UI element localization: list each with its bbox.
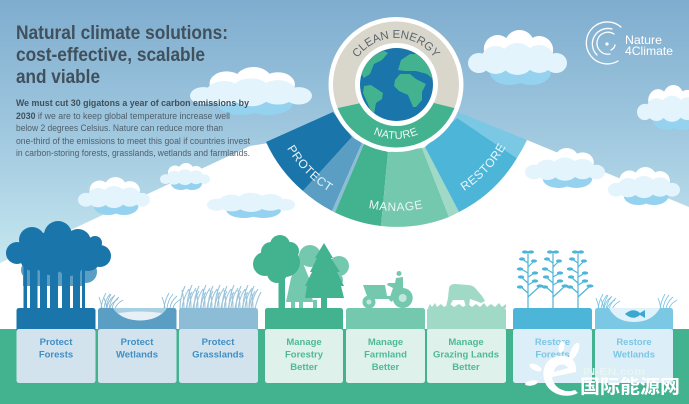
fan diagram	[266, 112, 527, 227]
card	[16, 329, 96, 383]
block	[265, 308, 343, 333]
segment: protect dark blue	[266, 112, 352, 191]
block	[427, 308, 506, 333]
label: Farmland	[364, 350, 407, 360]
column: protect grasslands	[179, 285, 261, 383]
label: Restore	[535, 337, 570, 348]
white mountain	[0, 132, 689, 404]
card	[595, 329, 673, 383]
column: manage grazing lands	[427, 284, 506, 383]
icon: watermark logo	[525, 341, 581, 396]
label: Protect	[202, 337, 235, 348]
label: protect: PROTECT	[287, 144, 334, 190]
green ground band	[0, 329, 689, 404]
icon: managed trees	[253, 235, 349, 308]
clouds	[78, 30, 689, 218]
intro text: We must cut 30 gigatons a year of carbon emissions by	[16, 98, 249, 108]
icon: globe	[360, 48, 434, 121]
title: and viable	[16, 66, 100, 88]
title	[16, 22, 228, 88]
label: Manage	[286, 337, 322, 348]
logo: Nature4Climate: 4Climate	[625, 44, 673, 58]
label: Grasslands	[192, 350, 244, 360]
column: manage farmland	[346, 271, 425, 383]
label: Forests	[39, 350, 73, 360]
icon: tractor	[362, 271, 413, 308]
column: manage forestry	[253, 235, 349, 383]
icon: saplings	[517, 250, 594, 309]
card	[427, 329, 506, 383]
segment: restore light blue	[457, 112, 527, 158]
central circle	[328, 17, 464, 152]
label: Manage	[448, 337, 484, 348]
label: Manage	[368, 337, 403, 348]
logo: Nature4Climate	[586, 22, 673, 64]
block	[346, 308, 425, 333]
card	[513, 329, 592, 383]
segment: protect light blue	[332, 143, 364, 212]
sky background	[0, 0, 689, 270]
column: restore forests	[513, 250, 594, 383]
label: restore: RESTORE	[460, 143, 506, 191]
intro text: below 2 degrees Celsius. Nature can reduce more than	[16, 123, 223, 133]
label: Wetlands	[613, 350, 655, 360]
segment: manage light green	[381, 148, 449, 227]
text: site name: IN-EN.com	[583, 367, 645, 378]
label: Better	[290, 362, 318, 373]
card	[265, 329, 343, 383]
nature band	[338, 102, 454, 148]
label: Better	[372, 362, 400, 373]
title: Natural climate solutions:	[16, 22, 228, 44]
icon: tall grass	[180, 285, 261, 309]
column: restore wetlands	[595, 294, 677, 383]
icon: reeds	[596, 294, 677, 310]
title: cost-effective, scalable	[16, 44, 205, 66]
watermark	[525, 341, 680, 398]
column: protect forests	[6, 221, 111, 383]
intro text	[16, 98, 250, 158]
label: Forests	[535, 350, 570, 360]
text: chinese site name: 国际能源网	[580, 376, 680, 398]
block	[16, 308, 96, 333]
label: nature: NATURE	[374, 127, 418, 139]
label: Forestry	[285, 350, 324, 360]
logo: Nature4Climate: Nature	[625, 33, 662, 47]
icon: cow	[428, 284, 506, 308]
card	[346, 329, 425, 383]
label: Restore	[616, 337, 652, 348]
label: Grazing Lands	[433, 350, 499, 360]
label: manage: MANAGE	[369, 200, 422, 211]
block with water	[98, 308, 176, 333]
label: clean energy: CLEAN ENERGY	[353, 30, 440, 56]
card	[98, 329, 176, 383]
card	[179, 329, 258, 383]
segment: manage green	[335, 144, 388, 226]
block	[179, 308, 258, 333]
segment: restore blue	[425, 118, 517, 212]
intro text: 2030 if we are to keep global temperature increase well	[16, 111, 230, 121]
icon: rainforest trees	[6, 221, 111, 308]
label: Protect	[40, 337, 73, 348]
segment: protect medium blue	[303, 137, 362, 211]
block with water	[595, 308, 673, 333]
icon: reeds	[99, 293, 181, 309]
intro text: one-third of the emissions to meet this goal if countries invest	[16, 136, 250, 146]
segment: manage pale green	[422, 147, 459, 217]
label: Wetlands	[116, 350, 158, 360]
icon: fish	[625, 310, 645, 318]
block	[513, 308, 592, 333]
label: Better	[452, 362, 480, 373]
intro text: in carbon-storing forests, grasslands, wetlands and farmlands.	[16, 148, 250, 158]
column: protect wetlands	[98, 293, 181, 383]
label: Protect	[121, 337, 154, 348]
